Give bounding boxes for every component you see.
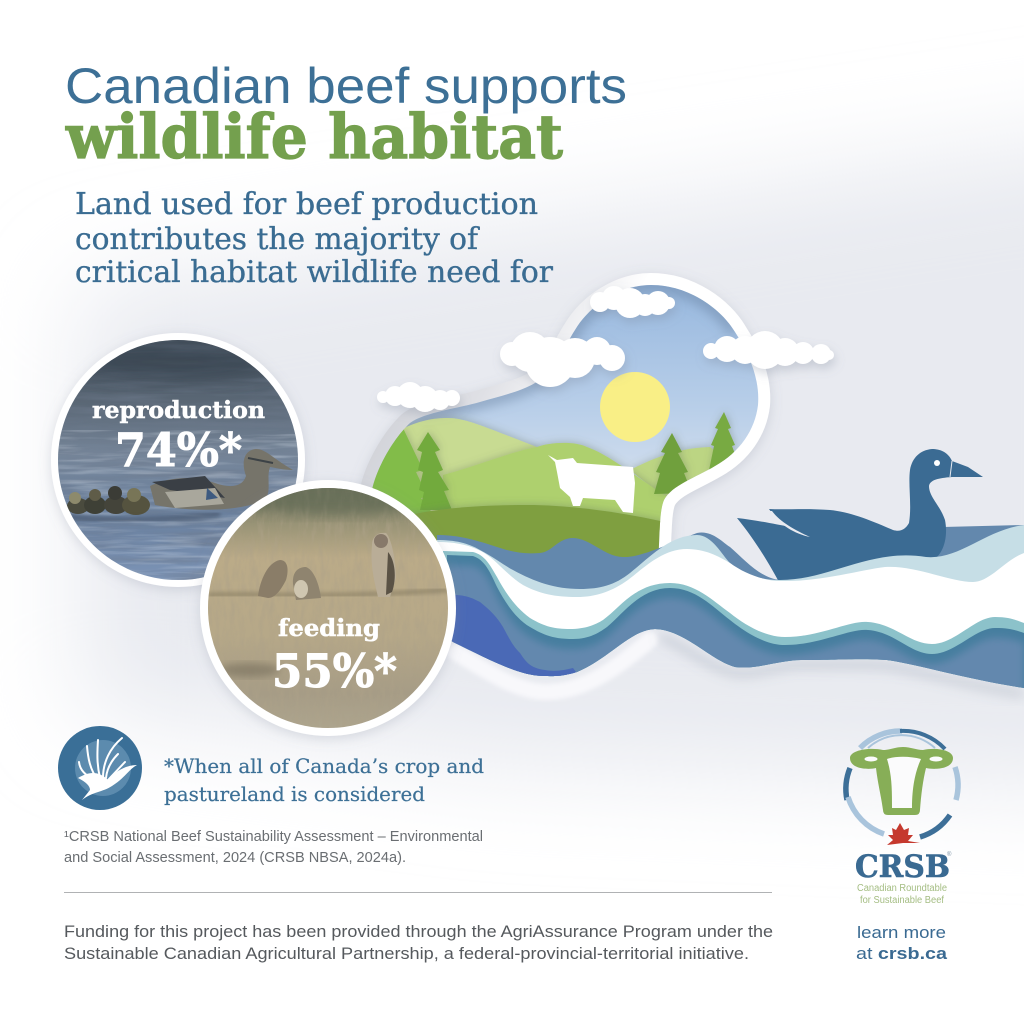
scene: sky and hills: [372, 285, 758, 557]
call to action: [856, 923, 948, 963]
citation: and Social Assessment, 2024 (CRSB NBSA, 2024a).: [64, 850, 406, 866]
label: reproduction 74%: [92, 397, 265, 477]
funding statement: [64, 923, 773, 963]
label: reproduction 74%: 74%*: [115, 423, 242, 477]
call to action: learn more: [857, 923, 946, 942]
footnote: asterisk: *When all of Canada’s crop and: [164, 754, 484, 778]
indigo layer: [452, 595, 576, 676]
icon: reeds and bird: [58, 726, 142, 810]
title: wildlife habitat: [65, 102, 563, 173]
logo: CRSB: [846, 731, 958, 906]
footnote: asterisk: pastureland is considered: [164, 782, 425, 806]
title: [65, 58, 627, 173]
logo: CRSB: for Sustainable Beef: [860, 895, 944, 906]
footnote: asterisk: [164, 754, 484, 806]
funding statement: Funding for this project has been provided through the AgriAssurance Program under the: [64, 923, 773, 941]
owls: [258, 533, 396, 600]
photo circle: feeding: [200, 479, 460, 740]
citation: [64, 829, 483, 866]
subtitle: contributes the majority of: [75, 222, 480, 257]
cow: [548, 455, 635, 513]
logo: CRSB: Canadian Roundtable: [857, 883, 947, 894]
label: reproduction 74%: reproduction: [92, 397, 265, 424]
photo circle: reproduction: [50, 330, 310, 590]
logo: CRSB: ®: [947, 851, 952, 858]
subtitle: [75, 187, 554, 290]
subtitle: Land used for beef production: [75, 187, 538, 222]
back blue band: [436, 525, 1024, 700]
call to action: at crsb.ca: [856, 944, 948, 963]
scene rim: [372, 285, 758, 565]
duck and ducklings: [67, 449, 293, 520]
illustration: paper cut landscape: [360, 280, 1024, 710]
waves: [436, 449, 1024, 710]
front hill: [413, 502, 660, 557]
wave layers: [437, 525, 1024, 688]
back hills: [399, 414, 540, 511]
trees: [362, 412, 738, 514]
label: feeding 55%: 55%*: [272, 644, 397, 698]
citation: ¹CRSB National Beef Sustainability Assessment – Environmental: [64, 829, 483, 845]
logo: CRSB: CRSB: [855, 849, 950, 885]
subtitle: critical habitat wildlife need for: [75, 255, 554, 290]
funding statement: Sustainable Canadian Agricultural Partnership, a federal-provincial-territorial initiative.: [64, 945, 749, 963]
title: Canadian beef supports: [65, 58, 627, 114]
label: feeding 55%: [272, 615, 397, 698]
clouds: [377, 286, 834, 412]
label: feeding 55%: feeding: [278, 615, 380, 642]
duck: [737, 449, 983, 584]
sun: [600, 372, 670, 442]
